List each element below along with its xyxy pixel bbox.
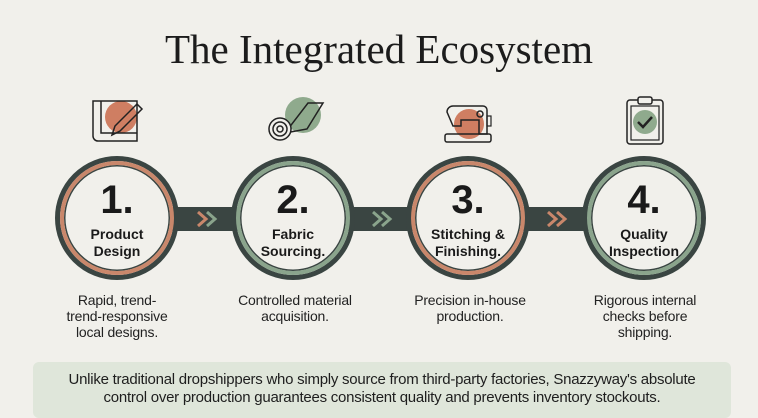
step 2 circle: Sourcing. bbox=[261, 243, 325, 259]
step 3 circle bbox=[406, 156, 530, 280]
step 4 circle: 4. bbox=[627, 178, 661, 222]
icon: sewing machine bbox=[444, 105, 492, 143]
description 1: local designs. bbox=[76, 324, 158, 340]
icon: clipboard check bbox=[626, 96, 664, 145]
description 3 bbox=[414, 292, 526, 324]
connector bar bbox=[172, 207, 588, 231]
step 1 circle bbox=[55, 156, 179, 280]
description 2: acquisition. bbox=[261, 308, 329, 324]
description 1 bbox=[66, 292, 168, 340]
step 2 circle bbox=[231, 156, 355, 280]
step 3 circle: Stitching & bbox=[431, 226, 505, 242]
icon: design sketch bbox=[92, 100, 143, 142]
step 1 circle: 1. bbox=[100, 178, 134, 222]
icon: fabric roll bbox=[268, 97, 324, 141]
description 1: Rapid, trend- bbox=[78, 292, 156, 308]
callout box: control over production guarantees consistent quality and prevents inventory stockouts. bbox=[104, 389, 660, 406]
description 4: Rigorous internal bbox=[594, 292, 696, 308]
step 3 circle: Finishing. bbox=[435, 243, 501, 259]
callout box: Unlike traditional dropshippers who simply source from third-party factories, Snazzyway's absolute bbox=[68, 371, 695, 388]
description 2 bbox=[238, 292, 352, 324]
step 4 circle: Inspection bbox=[609, 243, 679, 259]
description 1: trend-responsive bbox=[66, 308, 168, 324]
step 3 circle: 3. bbox=[451, 178, 485, 222]
description 4 bbox=[594, 292, 696, 340]
step 1 circle: Design bbox=[94, 243, 140, 259]
title: The Integrated Ecosystem bbox=[165, 26, 593, 72]
step 2 circle: 2. bbox=[276, 178, 310, 222]
description 3: Precision in-house bbox=[414, 292, 526, 308]
description 3: production. bbox=[436, 308, 504, 324]
callout box bbox=[33, 362, 731, 418]
step 4 circle bbox=[582, 156, 706, 280]
description 4: shipping. bbox=[618, 324, 672, 340]
step 2 circle: Fabric bbox=[272, 226, 314, 242]
step 1 circle: Product bbox=[91, 226, 143, 242]
description 4: checks before bbox=[603, 308, 687, 324]
step 4 circle: Quality bbox=[620, 226, 668, 242]
description 2: Controlled material bbox=[238, 292, 352, 308]
